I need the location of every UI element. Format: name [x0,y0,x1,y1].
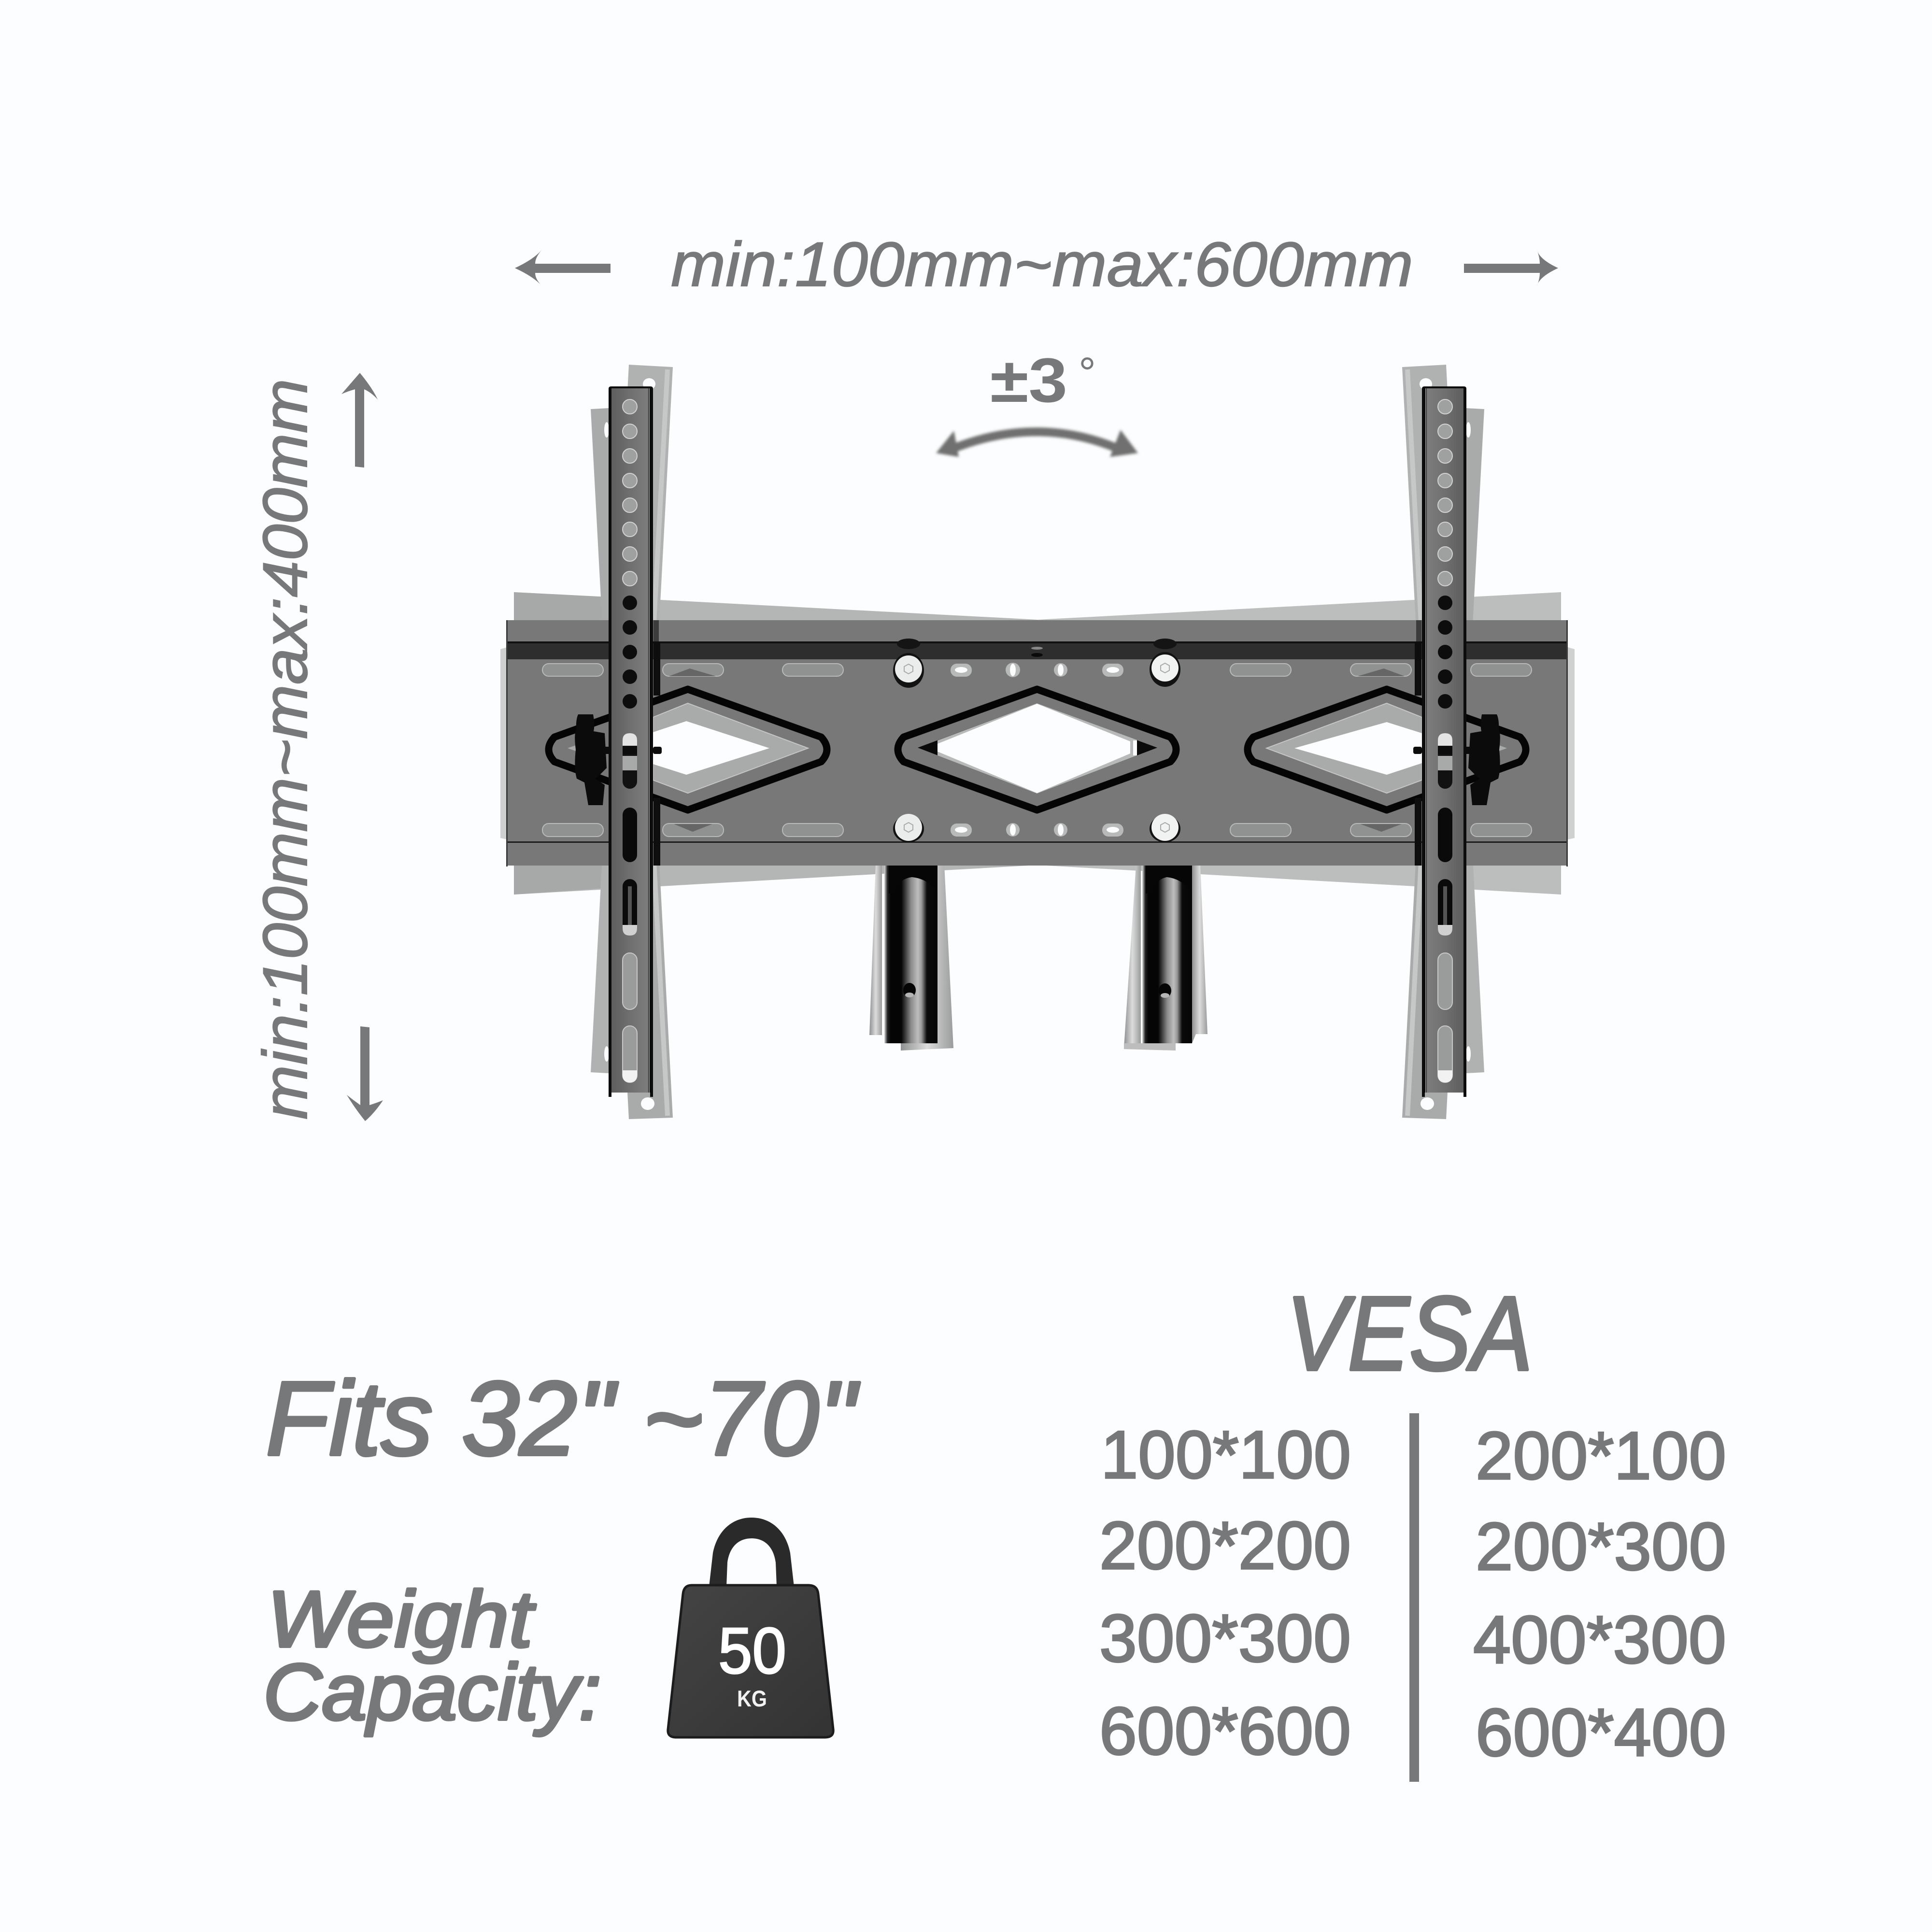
vertical dimension label: min:100mm~max:400mm [250,379,320,1120]
VESA sizes, left column: 300*300 [1099,1600,1351,1676]
diamond cut-out, right [1248,689,1526,810]
rotation label: ±3 [990,345,1067,415]
main mounting plate [506,620,1568,867]
weight capacity label: Capacity: [263,1648,601,1736]
hex bolts [893,639,1180,842]
diamond cut-out, left [549,689,827,810]
VESA sizes, right column: 600*400 [1476,1694,1726,1770]
weight capacity label: Weight [267,1575,536,1663]
rotation label: ° [1079,349,1096,398]
icon: 50 kg weight: KG [737,1686,767,1711]
tilt bolt [605,747,662,754]
VESA sizes, right column [1473,1418,1726,1770]
icon: 50 kg weight: 50 [718,1614,786,1687]
VESA sizes, left column: 600*600 [1099,1693,1351,1769]
plate slots [542,664,1532,837]
VESA sizes, left column [1099,1417,1351,1769]
ghost wall strips, left [591,365,673,1119]
VESA heading: VESA [1286,1275,1533,1392]
ghost panels showing rotation [500,592,1575,895]
rotation label [990,345,1096,415]
support tube, right [1124,865,1208,1051]
arrow: left [515,250,611,286]
VESA sizes, left column: 100*100 [1101,1417,1351,1492]
horizontal dimension label: min:100mm~max:600mm [671,229,1413,299]
arrow: down [347,1026,383,1121]
ghost wall strips, right [1402,365,1484,1119]
mount illustration [500,365,1575,1119]
VESA sizes, right column: 200*300 [1476,1508,1726,1584]
VESA sizes, left column: 200*200 [1099,1507,1351,1583]
VESA divider [1409,1413,1419,1782]
curved rotation arrow [936,430,1138,457]
arrow: up [341,373,378,468]
knob [575,714,607,805]
diamond cut-out, centre [898,689,1176,810]
bracket slots [623,733,637,1082]
weight capacity label [263,1575,601,1736]
support tube, left [869,865,953,1051]
arrow: right [1464,250,1558,286]
bracket holes [623,399,637,709]
VESA sizes, right column: 200*100 [1476,1418,1726,1493]
right vertical bracket [1413,386,1500,1097]
VESA sizes, right column: 400*300 [1473,1602,1726,1677]
left vertical bracket [575,386,662,1097]
icon: 50 kg weight [668,1518,833,1737]
small centre holes [951,647,1123,837]
screen size heading: Fits 32" ~70" [266,1360,860,1477]
